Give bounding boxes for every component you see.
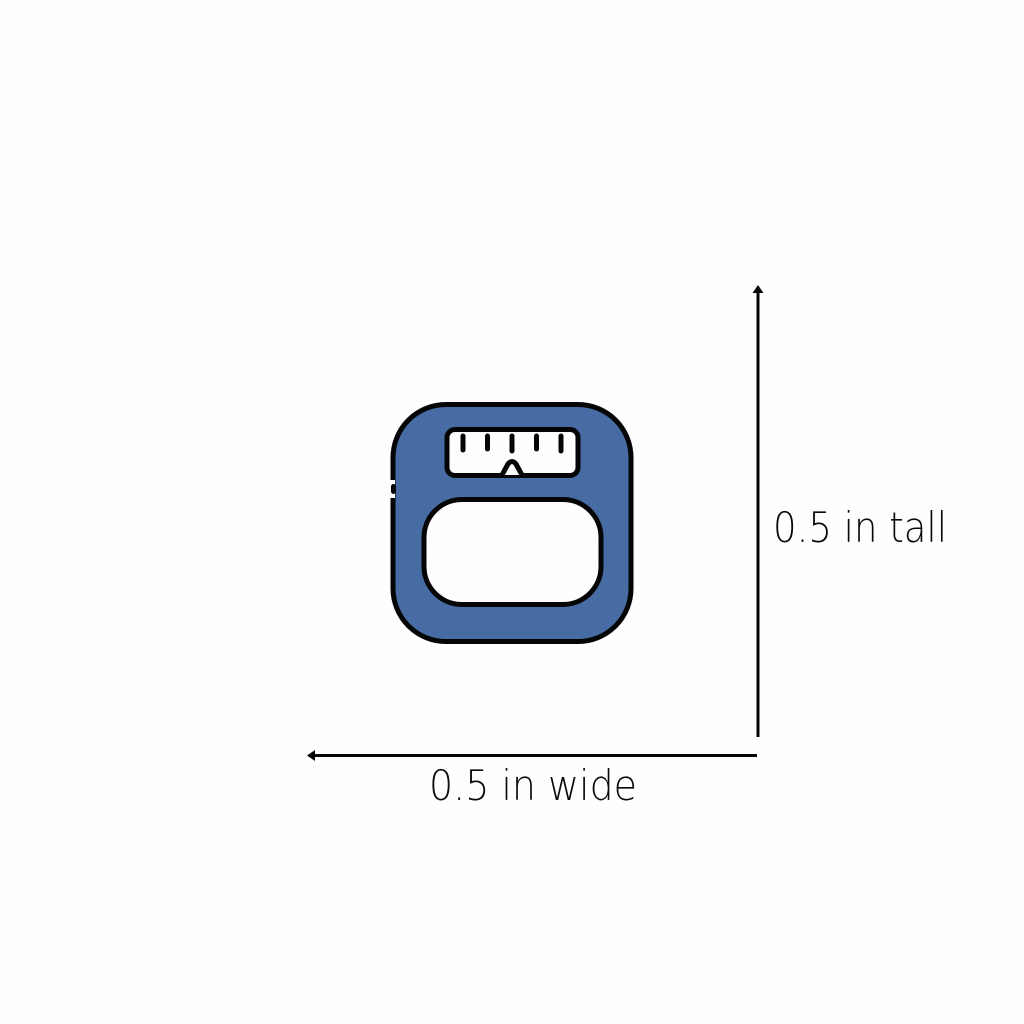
arrow: height dimension — [752, 285, 764, 737]
dial tick marks — [463, 436, 561, 451]
scale body — [393, 404, 631, 642]
weighing platform — [424, 500, 601, 604]
notch in left edge of scale — [389, 480, 396, 498]
arrow: width dimension — [307, 750, 757, 761]
dial pointer — [502, 462, 522, 475]
dial window — [447, 430, 578, 476]
label: width: 0.5 in wide — [429, 761, 637, 810]
icon: bathroom scale — [389, 404, 631, 642]
label: height: 0.5 in tall — [773, 503, 947, 552]
